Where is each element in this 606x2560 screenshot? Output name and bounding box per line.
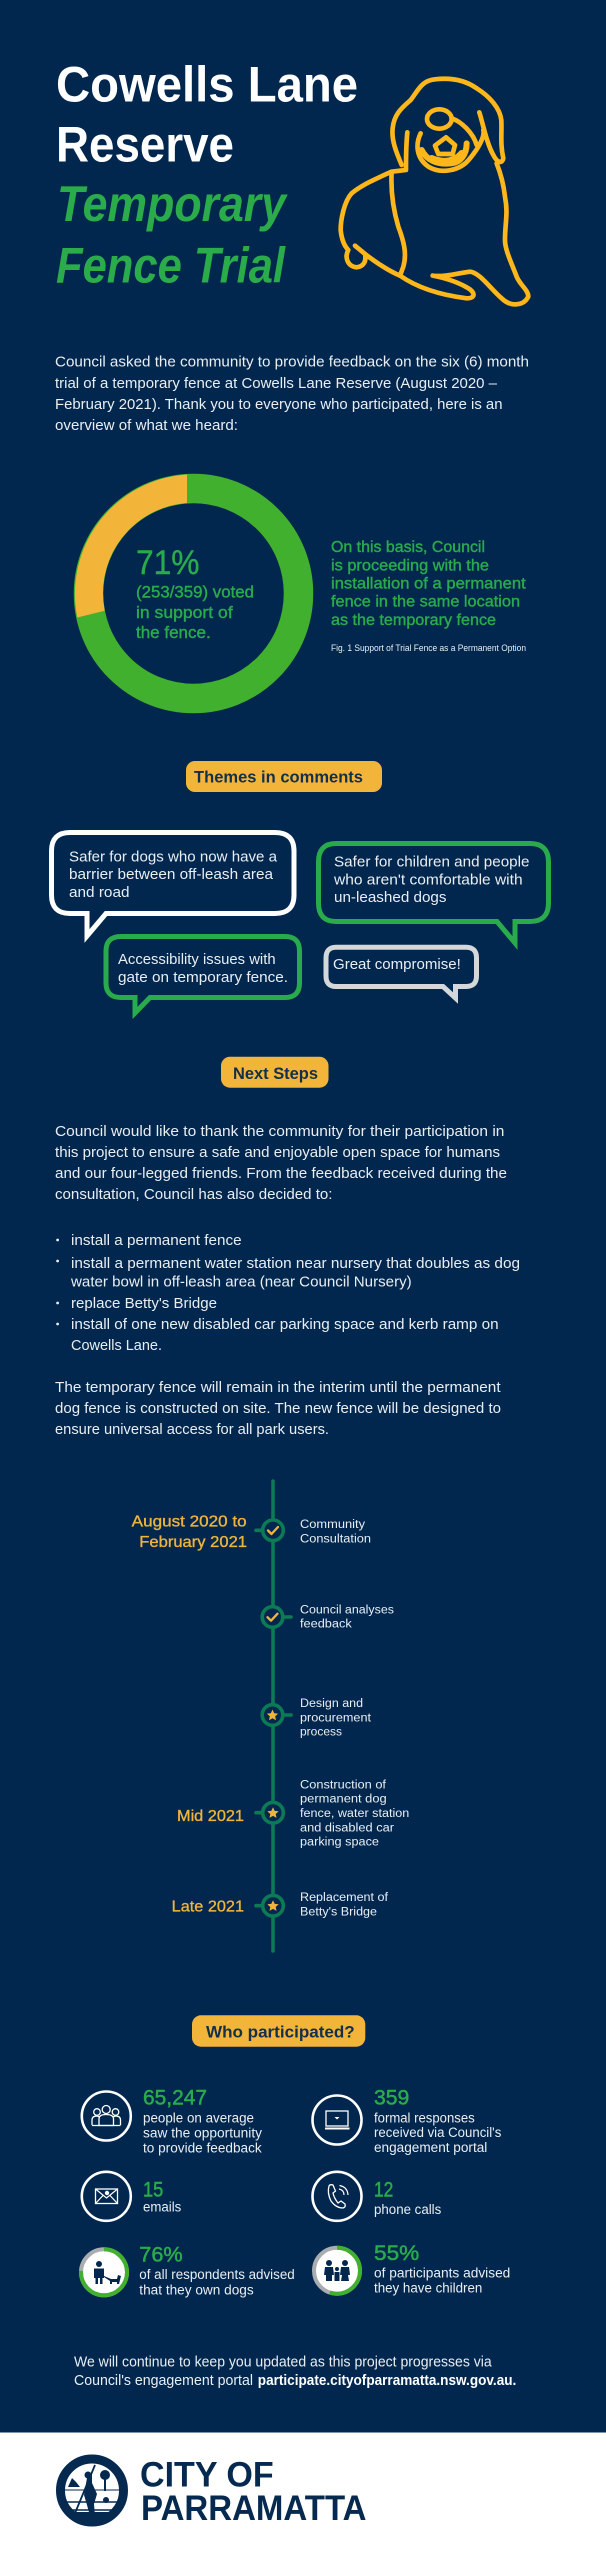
milestone: replacement of bridge [172, 1892, 389, 1918]
footer band [0, 2432, 606, 2560]
stat: people reached: people on average [143, 2111, 254, 2126]
bullet list: decisions [56, 1232, 520, 1354]
milestone: council analyses feedback: Council analyses [300, 1604, 394, 1616]
text block: introduction: Council asked the community to provide feedback on the six (6) month [55, 354, 529, 371]
text block: closing note: participate.cityofparramatta.nsw.gov.au. [258, 2373, 516, 2389]
donut label: 71% [136, 544, 200, 582]
text block: introduction: overview of what we heard: [55, 417, 238, 434]
speech bubble: safer for dogs: and road [69, 884, 130, 901]
milestone: design and procurement: process [300, 1727, 342, 1739]
logo: city of parramatta emblem [60, 2459, 124, 2522]
stat: dog owners: of all respondents advised [139, 2267, 295, 2282]
title: Temporary [57, 176, 288, 232]
speech bubble: safer for dogs: Safer for dogs who now have a [69, 849, 278, 866]
milestone: design and procurement [262, 1698, 372, 1739]
stat: phone calls [312, 2172, 442, 2221]
speech bubble: safer for dogs: barrier between off-leash area [69, 866, 274, 883]
figure caption: Fig. 1 Support of Trial Fence as a Permanent Option [331, 643, 526, 653]
speech bubble: safer for dogs [52, 832, 294, 936]
stat: formal responses: engagement portal [374, 2140, 487, 2155]
icon: phone [312, 2172, 362, 2221]
bullet list: decisions: install a permanent water station near nursery that doubles as dog [71, 1255, 520, 1272]
donut chart: support for fence [75, 474, 298, 698]
donut label: the fence. [136, 623, 211, 642]
text block: thanks to the community: and our four-legged friends. From the feedback received during the [55, 1165, 507, 1182]
logo: wordmark: CITY OF [140, 2456, 274, 2495]
stat: dog owners: that they own dogs [139, 2282, 254, 2297]
text block: thanks to the community: Council would like to thank the community for their participation in [55, 1123, 504, 1140]
speech bubble: accessibility issues [106, 936, 300, 1013]
title [56, 57, 358, 294]
stat: parents [314, 2242, 510, 2296]
text block: thanks to the community [55, 1123, 507, 1203]
speech bubble: accessibility issues: gate on temporary fence. [118, 969, 288, 986]
timeline axis [256, 1481, 291, 1951]
stat: people reached: 65,247 [143, 2087, 207, 2110]
milestone: replacement of bridge: Replacement of [300, 1892, 389, 1904]
icon: dog outline [341, 79, 528, 304]
milestone: community consultation: Consultation [300, 1533, 371, 1545]
stat: people reached: to provide feedback [143, 2141, 262, 2156]
callout: council decision: fence in the same location [331, 594, 520, 611]
callout: council decision: On this basis, Council [331, 539, 485, 556]
text block: closing note [74, 2355, 516, 2389]
milestone: community consultation [132, 1514, 371, 1551]
milestone: community consultation: Community [300, 1519, 365, 1531]
bullet list: decisions: Cowells Lane. [71, 1337, 162, 1354]
text block: temporary fence remains: The temporary fence will remain in the interim until the permanent [55, 1379, 501, 1396]
heading: who participated [192, 2015, 365, 2047]
milestone: community consultation: August 2020 to [132, 1514, 247, 1531]
heading: who participated: Who participated? [206, 2022, 355, 2041]
speech bubble: safer for children: Safer for children and people [334, 854, 530, 871]
icon: family, 55 percent ring [314, 2248, 360, 2294]
text block: introduction: February 2021). Thank you to everyone who participated, here is an [55, 396, 502, 413]
text block: introduction: trial of a temporary fence at Cowells Lane Reserve (August 2020 – [55, 375, 498, 392]
milestone: construction: Mid 2021 [177, 1808, 244, 1825]
stat: dog owners: 76% [139, 2244, 183, 2267]
stat: formal responses [312, 2086, 502, 2155]
callout: council decision [331, 539, 526, 653]
milestone: design and procurement: procurement [300, 1712, 372, 1724]
speech bubble: safer for children: who aren't comfortable with [333, 872, 523, 888]
stat: formal responses: 359 [374, 2086, 409, 2109]
bullet list: decisions: install a permanent fence [71, 1232, 242, 1249]
text block: temporary fence remains: dog fence is constructed on site. The new fence will be designed to [55, 1400, 501, 1417]
stat: people reached: saw the opportunity [143, 2125, 262, 2140]
donut label [136, 544, 254, 642]
stat: emails: 15 [143, 2179, 163, 2202]
text block: temporary fence remains: ensure universal access for all park users. [55, 1421, 329, 1438]
title: Reserve [56, 117, 234, 173]
milestone: construction: fence, water station [300, 1808, 409, 1820]
text block: thanks to the community: consultation, Council has also decided to: [55, 1186, 332, 1203]
stat: emails: emails [143, 2199, 182, 2214]
milestone: construction: and disabled car [300, 1822, 394, 1834]
icon: laptop [312, 2096, 362, 2144]
title: Fence Trial [56, 238, 286, 294]
milestone: replacement of bridge: Betty's Bridge [300, 1906, 377, 1918]
timeline [132, 1481, 409, 1951]
stat: phone calls: 12 [374, 2179, 393, 2202]
icon: envelope [82, 2172, 131, 2221]
text block: temporary fence remains [55, 1379, 501, 1438]
stat: phone calls: phone calls [374, 2202, 442, 2217]
callout: council decision: is proceeding with the [331, 558, 489, 575]
speech bubble: safer for children: un-leashed dogs [334, 889, 446, 906]
callout: council decision: as the temporary fence [331, 612, 496, 629]
bullet list: decisions: install of one new disabled car parking space and kerb ramp on [71, 1316, 499, 1333]
stat: formal responses: received via Council's [374, 2125, 502, 2140]
donut label: in support of [136, 603, 233, 622]
milestone: council analyses feedback: feedback [300, 1619, 352, 1631]
heading: next steps: Next Steps [233, 1064, 318, 1083]
speech bubble: great compromise: Great compromise! [333, 956, 461, 973]
speech bubble: accessibility issues: Accessibility issues with [118, 951, 276, 968]
donut label: (253/359) voted [136, 583, 254, 602]
heading: next steps [221, 1057, 328, 1088]
heading: themes in comments [186, 761, 382, 792]
icon: person with dog, 76 percent ring [81, 2249, 127, 2295]
stat: dog owners [81, 2244, 295, 2297]
bullet list: decisions: replace Betty's Bridge [71, 1295, 217, 1312]
text block: closing note: We will continue to keep you updated as this project progresses via [74, 2355, 493, 2371]
text block: introduction [55, 354, 529, 434]
milestone: replacement of bridge: Late 2021 [172, 1899, 244, 1916]
speech bubble: great compromise [326, 947, 476, 998]
stat: emails [82, 2172, 182, 2221]
logo: wordmark [140, 2456, 366, 2528]
milestone: community consultation: February 2021 [139, 1534, 247, 1551]
stat: parents: they have children [374, 2281, 482, 2296]
stat: parents: 55% [374, 2242, 419, 2265]
text block: closing note: Council's engagement portal [74, 2373, 253, 2389]
logo: wordmark: PARRAMATTA [141, 2489, 366, 2528]
milestone: construction: permanent dog [300, 1794, 387, 1806]
stat: formal responses: formal responses [374, 2110, 475, 2125]
milestone: construction [177, 1779, 409, 1849]
text block: thanks to the community: this project to ensure a safe and enjoyable open space for humans [55, 1144, 500, 1161]
milestone: construction: Construction of [300, 1779, 387, 1791]
speech bubble: safer for children [318, 844, 548, 943]
bullet list: decisions: water bowl in off-leash area (near Council Nursery) [70, 1274, 412, 1291]
title: Cowells Lane [56, 57, 358, 113]
stat: people reached [82, 2087, 262, 2156]
stat: parents: of participants advised [374, 2266, 510, 2281]
callout: council decision: installation of a permanent [331, 576, 526, 593]
icon: group of people [82, 2092, 131, 2140]
heading: themes in comments: Themes in comments [194, 768, 363, 787]
milestone: construction: parking space [300, 1837, 379, 1849]
milestone: council analyses feedback [262, 1604, 394, 1631]
milestone: design and procurement: Design and [300, 1698, 363, 1710]
